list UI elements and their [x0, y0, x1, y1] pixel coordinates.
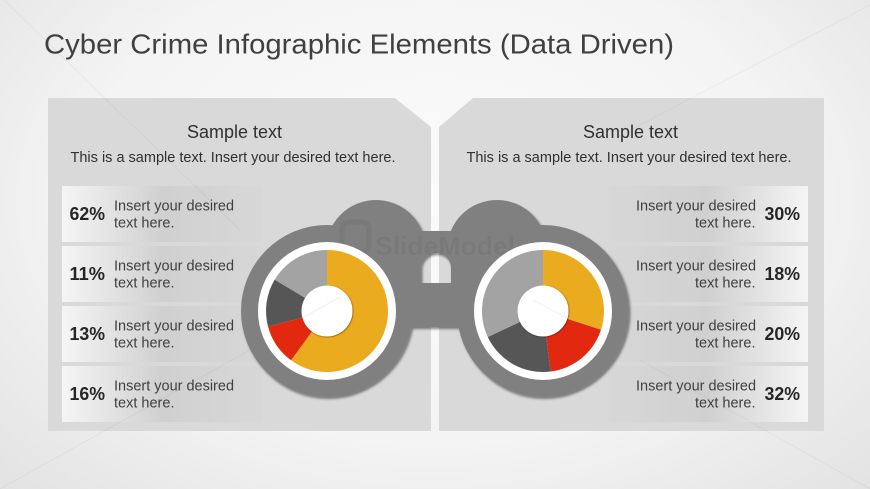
icon: binoculars: [241, 200, 629, 397]
row: 11%: text here.: [114, 276, 174, 292]
right donut chart: [482, 250, 604, 372]
right heading: Sample text: [583, 122, 678, 142]
row: 11%: 11%: [70, 264, 105, 284]
row: 62%: text here.: [114, 216, 174, 232]
row: 20%: [608, 306, 808, 362]
left description: This is a sample text. Insert your desired text here.: [70, 150, 396, 166]
row: 18%: Insert your desired: [636, 258, 756, 274]
row: 20%: text here.: [695, 336, 756, 352]
row: 30%: Insert your desired: [636, 198, 756, 214]
left lens ring: [258, 242, 396, 380]
row: 16%: [62, 366, 262, 422]
title: Cyber Crime Infographic Elements (Data Driven): [44, 28, 674, 60]
row: 30%: text here.: [695, 216, 756, 232]
row: 30%: 30%: [764, 204, 800, 224]
row: 18%: text here.: [695, 276, 756, 292]
row: 32%: [608, 366, 808, 422]
row: 13%: text here.: [114, 336, 174, 352]
row: 16%: text here.: [114, 396, 174, 412]
row: 32%: Insert your desired: [636, 378, 756, 394]
left heading: Sample text: [187, 122, 282, 142]
row: 20%: Insert your desired: [636, 318, 756, 334]
row: 13%: [62, 306, 262, 362]
row: 32%: 32%: [764, 384, 800, 404]
right lens ring: [474, 242, 612, 380]
row: 11%: Insert your desired: [114, 258, 234, 274]
row: 62%: 62%: [70, 204, 105, 224]
row: 13%: 13%: [70, 324, 105, 344]
row: 62%: Insert your desired: [114, 198, 234, 214]
row: 16%: Insert your desired: [114, 378, 234, 394]
row: 18%: 18%: [764, 264, 800, 284]
row: 16%: 16%: [70, 384, 105, 404]
panel: right: [439, 98, 824, 431]
panel: left: [48, 98, 431, 431]
row: 18%: [608, 246, 808, 302]
row: 32%: text here.: [695, 396, 756, 412]
row: 13%: Insert your desired: [114, 318, 234, 334]
watermark: [342, 222, 515, 261]
row: 62%: [62, 186, 262, 242]
row: 20%: 20%: [764, 324, 800, 344]
watermark: SlideModel: [375, 231, 515, 261]
right description: This is a sample text. Insert your desired text here.: [466, 150, 792, 166]
row: 11%: [62, 246, 262, 302]
binoculars body: [241, 200, 629, 397]
left donut chart: [266, 250, 388, 372]
row: 30%: [608, 186, 808, 242]
